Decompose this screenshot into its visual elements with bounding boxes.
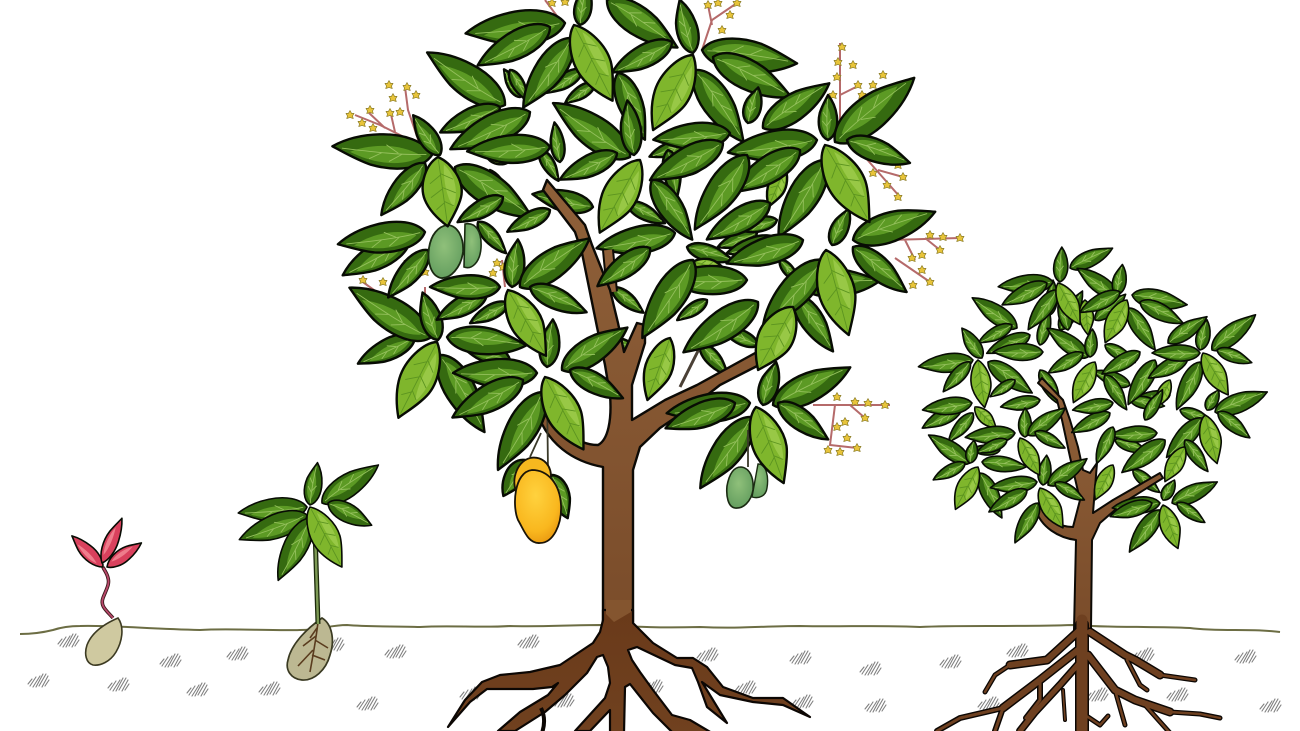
stage 1: germinating seed [67,515,145,665]
flower panicles [346,0,964,456]
stage 2: sapling [235,455,385,680]
red leaves [67,515,145,572]
sapling seed [287,618,332,680]
sapling stem [315,530,318,624]
trunk and branches [535,180,759,632]
soil hatching marks [28,634,1281,712]
young tree trunk [1035,378,1163,630]
back foliage [455,64,881,380]
young tree roots [937,620,1220,731]
stub branch [608,250,612,292]
young tree dark leaves [917,241,1271,557]
seed [86,618,122,665]
root twig [541,708,544,731]
young tree pale leaves [947,279,1237,552]
fruit stems [530,390,748,470]
leaves by ripe mango [495,455,577,522]
stage 3: mature fruiting mango tree [331,0,964,731]
ground line [20,625,1280,634]
dark green leaves [331,0,940,497]
thin side branch [680,347,700,387]
pale green leaves [383,17,885,489]
stage 4: young mango tree [917,241,1271,731]
root collar highlight [606,600,631,622]
ripe yellow mangoes [514,458,551,494]
mangoes and fruit stems [428,224,768,543]
sapling leaves [235,455,385,586]
main tree roots [448,610,810,731]
pink stem [102,567,113,618]
green mangoes, upper left [464,224,481,268]
seedling roots [298,622,328,672]
green mangoes, lower right [752,464,768,498]
young tree back foliage [944,280,1215,522]
